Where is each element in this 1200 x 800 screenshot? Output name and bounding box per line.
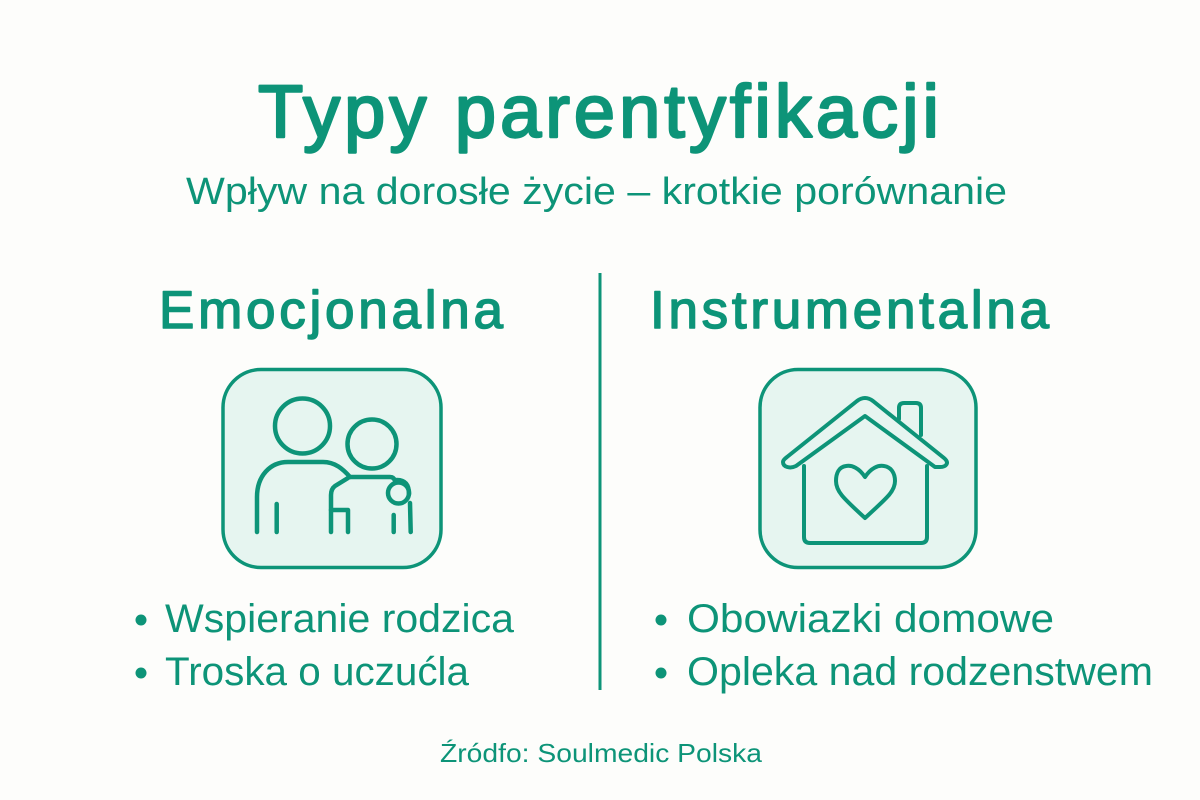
panel: Emocjonalna	[136, 281, 515, 694]
title: Typy parentyfikacji	[258, 70, 939, 153]
panel: Instrumentalna	[650, 281, 1153, 694]
subtitle: Wpływ na dorosłe życie – krotkie porównanie	[186, 171, 1007, 213]
bullet list: Instrumentalna	[656, 597, 1153, 694]
heading: Emocjonalna: Emocjonalna	[159, 281, 504, 340]
item: Wspieranie rodzica: Wspieranie rodzica	[165, 597, 515, 641]
bullet 1	[136, 614, 146, 626]
item: Opieka nad rodzenstwem: Opleka nad rodzenstwem	[687, 650, 1153, 694]
item: Obowiazki domowe: Obowiazki domowe	[687, 597, 1054, 641]
icon: house with heart	[760, 370, 976, 568]
heading: Instrumentalna: Instrumentalna	[650, 281, 1050, 340]
bullet list: Emocjonalna	[136, 597, 515, 694]
bullet 2	[656, 668, 666, 678]
item: Troska o uczucia: Troska o uczućla	[165, 650, 470, 694]
bullet 1	[656, 614, 666, 626]
source footer: Źródfo: Soulmedic Polska	[440, 738, 763, 768]
bullet 2	[136, 668, 146, 678]
center divider	[598, 273, 602, 690]
icon: parent and child	[223, 370, 441, 568]
